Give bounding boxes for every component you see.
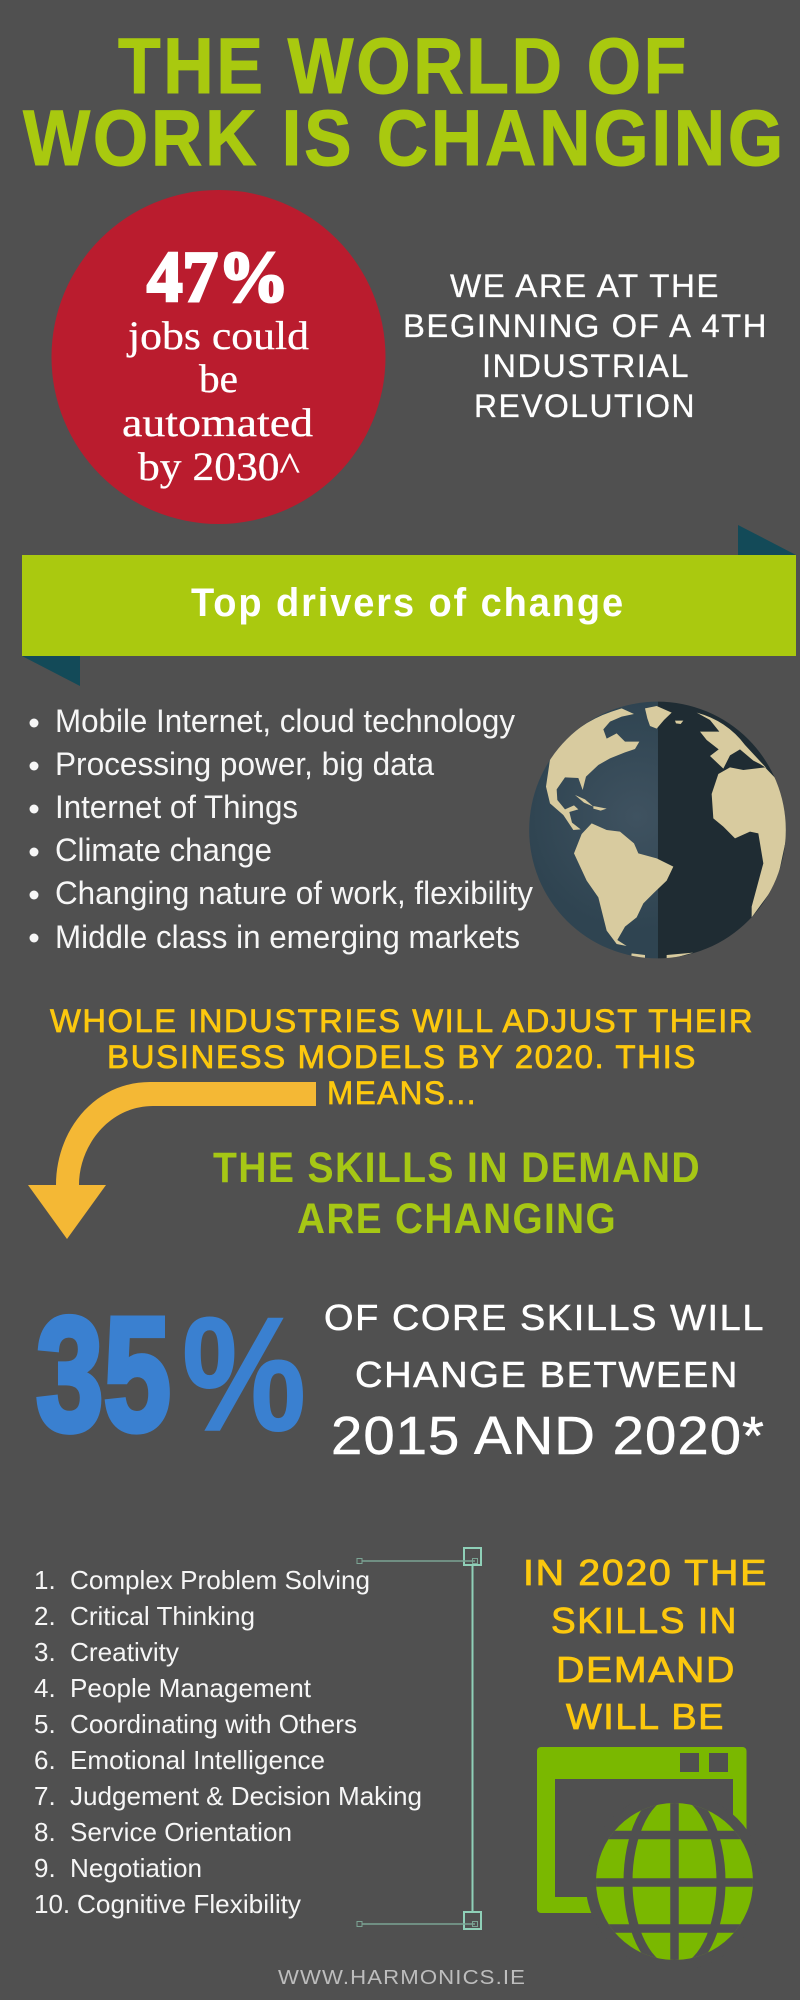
text block: 4th industrial revolution: INDUSTRIAL [482, 348, 690, 384]
list: top ten skills: Critical Thinking [70, 1601, 255, 1631]
stat description: automated [122, 400, 313, 445]
icon: earth globe [527, 700, 788, 960]
title: THE WORLD OF [118, 21, 689, 110]
stat description [122, 313, 313, 489]
list: top ten skills: Creativity [70, 1637, 179, 1667]
list: top ten skills: Service Orientation [70, 1817, 292, 1847]
list: top ten skills: Emotional Intelligence [70, 1745, 325, 1775]
list: top ten skills: 7. [34, 1781, 56, 1811]
stat: 35%: % [182, 1284, 306, 1465]
panel: 47% stat circle [52, 190, 386, 524]
list: top ten skills: People Management [70, 1673, 312, 1703]
footer: website: WWW.HARMONICS.IE [278, 1967, 526, 1989]
list: top ten skills: Negotiation [70, 1853, 202, 1883]
bracket connector [357, 1548, 481, 1929]
list: drivers of change: Internet of Things [55, 789, 298, 825]
stat: 47%: 47% [147, 237, 289, 317]
heading: skills in demand: THE SKILLS IN DEMAND [213, 1144, 701, 1192]
text block: 4th industrial revolution: REVOLUTION [474, 388, 696, 424]
banner: top drivers of change [22, 525, 796, 686]
text block: 4th industrial revolution [403, 268, 768, 424]
heading: in 2020 the skills in demand will be: DEMAND [556, 1649, 736, 1690]
arrow: curved down arrow [28, 1082, 316, 1239]
text block: core skills: 2015 AND 2020* [331, 1406, 765, 1466]
list: top ten skills: 5. [34, 1709, 56, 1739]
list: drivers of change: Mobile Internet, cloud technology [55, 703, 515, 739]
list: top ten skills: 1. [34, 1565, 56, 1595]
text block: whole industries: BUSINESS MODELS BY 2020. THIS [107, 1039, 697, 1075]
heading: in 2020 the skills in demand will be: IN 2020 THE [523, 1552, 768, 1593]
heading: in 2020 the skills in demand will be: SKILLS IN [551, 1600, 738, 1641]
list: top ten skills: 6. [34, 1745, 56, 1775]
stat description: jobs could [126, 313, 309, 358]
text block: whole industries [50, 1003, 754, 1111]
list: drivers of change: Changing nature of work, flexibility [55, 875, 533, 911]
text block: core skills: CHANGE BETWEEN [355, 1354, 739, 1395]
text block: core skills [324, 1297, 765, 1466]
heading: in 2020 the skills in demand will be: WILL BE [566, 1696, 725, 1737]
text block: 4th industrial revolution: BEGINNING OF A 4TH [403, 308, 768, 344]
banner heading: Top drivers of change [191, 581, 625, 625]
stat description: be [199, 356, 238, 401]
list: top ten skills: Judgement & Decision Making [70, 1781, 422, 1811]
list: top ten skills: Cognitive Flexibility [77, 1889, 301, 1919]
list: top ten skills: 4. [34, 1673, 56, 1703]
heading: skills in demand [213, 1144, 701, 1243]
list: top ten skills: Coordinating with Others [70, 1709, 357, 1739]
stat: 35% [36, 1284, 306, 1465]
list: drivers of change: Middle class in emerging markets [55, 919, 520, 955]
list: top ten skills [34, 1565, 422, 1919]
title [23, 21, 786, 182]
icon: web browser with globe [537, 1747, 764, 1970]
text block: core skills: OF CORE SKILLS WILL [324, 1297, 765, 1338]
text block: whole industries: MEANS... [327, 1075, 477, 1111]
list: top ten skills: 10. [34, 1889, 70, 1919]
stat description: by 2030^ [138, 444, 300, 489]
heading: skills in demand: ARE CHANGING [297, 1195, 617, 1243]
list: top ten skills: 3. [34, 1637, 56, 1667]
text block: whole industries: WHOLE INDUSTRIES WILL ADJUST THEIR [50, 1003, 754, 1039]
list: top ten skills: Complex Problem Solving [70, 1565, 370, 1595]
list: top ten skills: 8. [34, 1817, 56, 1847]
heading: in 2020 the skills in demand will be [523, 1552, 768, 1737]
list: drivers of change: Processing power, big data [55, 746, 434, 782]
text block: 4th industrial revolution: WE ARE AT THE [450, 268, 720, 304]
list: drivers of change: Climate change [55, 832, 272, 868]
list: drivers of change [30, 703, 533, 955]
stat: 35%: 35 [36, 1284, 171, 1465]
list: top ten skills: 9. [34, 1853, 56, 1883]
list: top ten skills: 2. [34, 1601, 56, 1631]
